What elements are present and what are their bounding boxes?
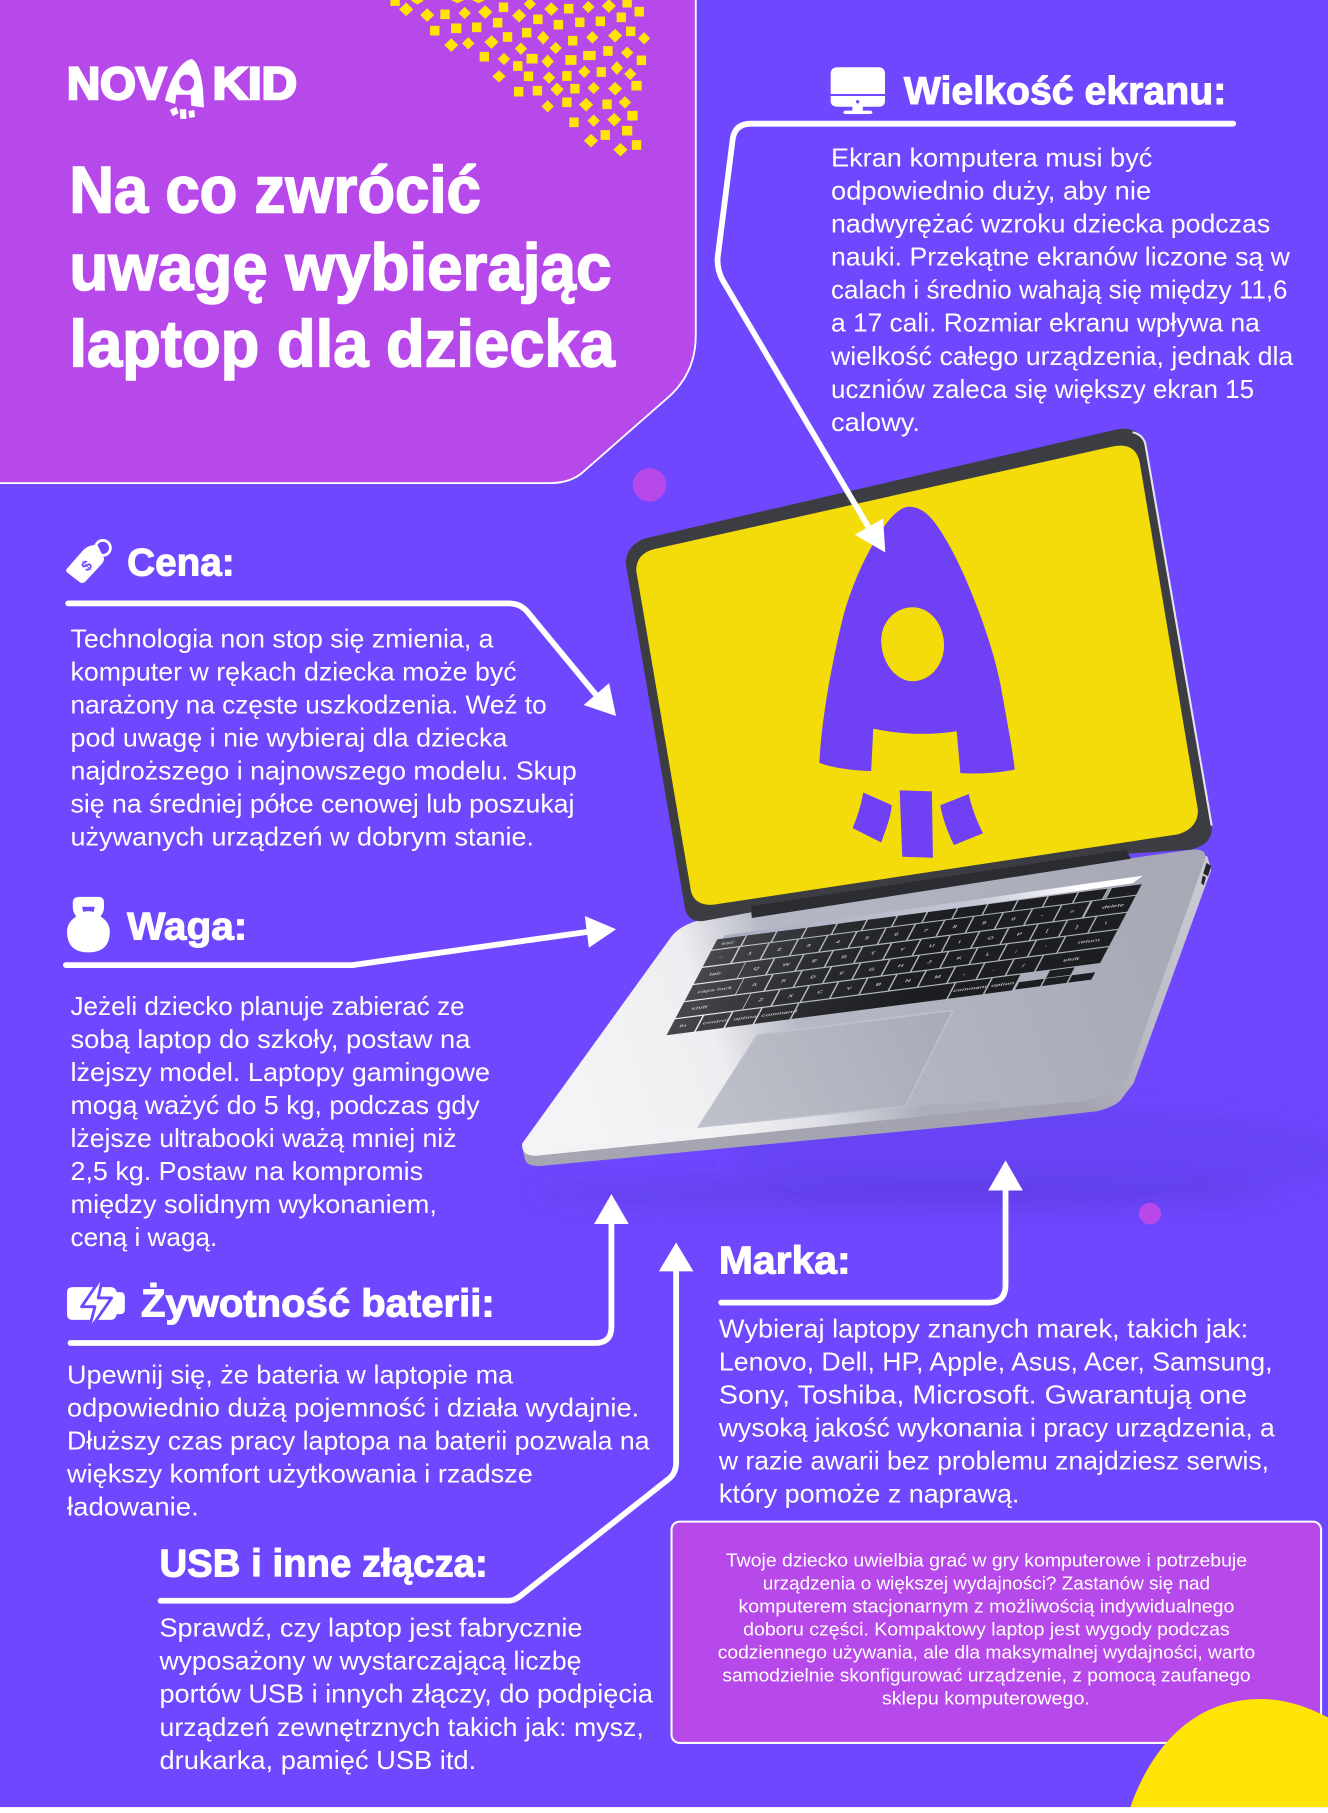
text: brand: w razie awarii bez problemu znajdziesz serwis, (718, 1445, 1269, 1475)
icon: monitor (831, 67, 885, 114)
keyboard: delete (1101, 903, 1126, 910)
keyboard: caps lock (696, 985, 734, 995)
text: brand (718, 1313, 1275, 1509)
laptop lid (626, 429, 1212, 921)
text: price: komputer w rękach dziecka może być (71, 656, 517, 686)
text: ports: Sprawdź, czy laptop jest fabrycznie (159, 1613, 583, 1643)
keyboard: command (760, 1009, 798, 1018)
title: laptop dla dziecka (69, 306, 616, 380)
text: weight: lżejszy model. Laptopy gamingowe (71, 1057, 490, 1087)
text: screen size: a 17 cali. Rozmiar ekranu wpływa na (831, 308, 1260, 338)
text: weight: ceną i wagą. (71, 1222, 217, 1252)
icon: price tag: $ (78, 557, 96, 575)
keyboard: control (701, 1018, 730, 1026)
text: screen size: nadwyrężać wzroku dziecka podczas (831, 209, 1270, 239)
laptop shadow (526, 1107, 1328, 1204)
logo: NOVAKID (67, 58, 297, 119)
text: price: narażony na częste uszkodzenia. Weź to (71, 689, 547, 719)
heading: ports: USB i inne złącza: (159, 1542, 488, 1586)
heading: battery life: Żywotność baterii: (141, 1281, 495, 1325)
keyboard: return (1077, 938, 1101, 945)
text: brand: Wybieraj laptopy znanych marek, takich jak: (719, 1313, 1248, 1343)
rocket on screen (819, 507, 1015, 858)
keyboard: ZXCVBNM,./ (757, 964, 1026, 1003)
arrow: weight (66, 916, 616, 965)
keyboard: option (732, 1014, 758, 1022)
heading: brand: Marka: (719, 1239, 851, 1283)
text: price: pod uwagę i nie wybieraj dla dziecka (71, 722, 508, 752)
keyboard: fn (678, 1023, 688, 1029)
panel: title background (0, 0, 696, 483)
text: price: używanych urządzeń w dobrym stanie. (71, 822, 534, 852)
text: battery life: ładowanie. (67, 1492, 199, 1522)
title (69, 153, 616, 380)
trackpad (699, 1010, 953, 1127)
icon: price tag (66, 540, 110, 583)
text: ports: drukarka, pamięć USB itd. (159, 1745, 476, 1775)
text: weight: sobą laptop do szkoły, postaw na (71, 1024, 471, 1054)
text: screen size: calowy. (831, 407, 920, 437)
icon: kettlebell (67, 897, 110, 952)
keyboard: option (990, 981, 1016, 988)
text: screen size: uczniów zaleca się większy ekran 15 (831, 374, 1254, 404)
text: battery life: odpowiednio dużą pojemność i działa wydajnie. (67, 1393, 639, 1423)
text: ports: portów USB i innych złączy, do podpięcia (159, 1679, 654, 1709)
icon: battery with bolt (67, 1275, 125, 1331)
text: price: najdroższego i najnowszego modelu. Skup (71, 755, 577, 785)
text: price: się na średniej półce cenowej lub poszukaj (71, 789, 574, 819)
text: weight: lżejsze ultrabooki ważą mniej niż (71, 1123, 457, 1153)
keyboard: tab (708, 971, 722, 977)
callout text: Twoje dziecko uwielbia grać w gry komputerowe i potrzebuje (726, 1550, 1247, 1571)
text: brand: wysoką jakość wykonania i pracy urządzenia, a (718, 1412, 1275, 1442)
text: ports: wyposażony w wystarczającą liczbę (158, 1646, 581, 1676)
logo: NOVAKID: NOV (67, 58, 166, 109)
heading: price: Cena: (127, 541, 235, 585)
callout text: codziennego używania, ale dla maksymalnej wydajności, warto (718, 1642, 1255, 1663)
decorative yellow blob (1130, 1699, 1328, 1807)
logo: NOVAKID: KID (213, 58, 297, 109)
port (1201, 863, 1211, 885)
lid edge highlight (1132, 432, 1212, 826)
hinge (751, 850, 1131, 918)
text: battery life (66, 1359, 650, 1522)
arrow: ports (161, 1242, 693, 1601)
callout text (718, 1550, 1255, 1709)
laptop base (522, 850, 1211, 1166)
title: uwagę wybierając (69, 230, 611, 304)
text: screen size: wielkość całego urządzenia, jednak dla (830, 341, 1294, 371)
text: battery life: Upewnij się, że bateria w laptopie ma (67, 1359, 514, 1389)
arrow: screen size (718, 124, 1233, 552)
keyboard: ~1234567890-= (717, 909, 1076, 960)
keyboard: ASDFGHJKL;' (750, 945, 1048, 988)
keyboard: QWERTYUIOP[]\ (752, 921, 1108, 971)
text: screen size: Ekran komputera musi być (831, 142, 1152, 172)
callout text: sklepu komputerowego. (882, 1688, 1090, 1709)
decorative dot: lower (1139, 1203, 1161, 1225)
keyboard (669, 888, 1140, 1031)
keyboard strip (722, 876, 1143, 941)
laptop illustration (522, 429, 1212, 1166)
text: weight: mogą ważyć do 5 kg, podczas gdy (71, 1090, 480, 1120)
text: screen size: nauki. Przekątne ekranów liczone są w (831, 242, 1290, 272)
arrow: battery (71, 1194, 629, 1343)
keyboard: shift (690, 1005, 710, 1011)
callout text: komputerem stacjonarnym z możliwością indywidualnego (739, 1596, 1234, 1617)
keyboard: esc (720, 940, 736, 946)
text: weight (71, 991, 490, 1252)
text: screen size (830, 142, 1294, 437)
text: battery life: większy komfort użytkowania i rzadsze (66, 1459, 533, 1489)
arrow: brand (721, 1160, 1023, 1303)
decorative yellow dots (391, 0, 649, 156)
text: brand: Lenovo, Dell, HP, Apple, Asus, Acer, Samsung, (719, 1346, 1273, 1376)
text: weight: 2,5 kg. Postaw na kompromis (71, 1156, 423, 1186)
callout text: urządzenia o większej wydajności? Zastanów się nad (763, 1573, 1210, 1594)
text: ports: urządzeń zewnętrznych takich jak: mysz, (159, 1712, 644, 1742)
keyboard: shift (1062, 956, 1081, 963)
text: price (71, 623, 577, 852)
laptop screen (636, 446, 1198, 905)
text: weight: Jeżeli dziecko planuje zabierać ze (71, 991, 465, 1021)
text: battery life: Dłuższy czas pracy laptopa na baterii pozwala na (67, 1426, 650, 1456)
arrow: price (68, 603, 616, 716)
heading: screen size: Wielkość ekranu: (904, 69, 1226, 113)
callout panel (672, 1522, 1321, 1743)
heading: weight: Waga: (127, 905, 247, 949)
text: ports (158, 1613, 654, 1775)
text: screen size: odpowiednio duży, aby nie (831, 176, 1151, 206)
callout text: samodzielnie skonfigurować urządzenie, z pomocą zaufanego (722, 1665, 1251, 1686)
text: price: Technologia non stop się zmienia, a (71, 623, 494, 653)
text: screen size: calach i średnio wahają się między 11,6 (831, 275, 1288, 305)
decorative dot: upper (633, 468, 666, 502)
text: brand: który pomoże z naprawą. (719, 1479, 1019, 1509)
text: brand: Sony, Toshiba, Microsoft. Gwarantują one (719, 1379, 1247, 1409)
keyboard: command (952, 984, 990, 993)
callout text: doboru części. Kompaktowy laptop jest wygody podczas (743, 1619, 1230, 1640)
text: weight: między solidnym wykonaniem, (71, 1189, 437, 1219)
title: Na co zwrócić (69, 153, 481, 227)
